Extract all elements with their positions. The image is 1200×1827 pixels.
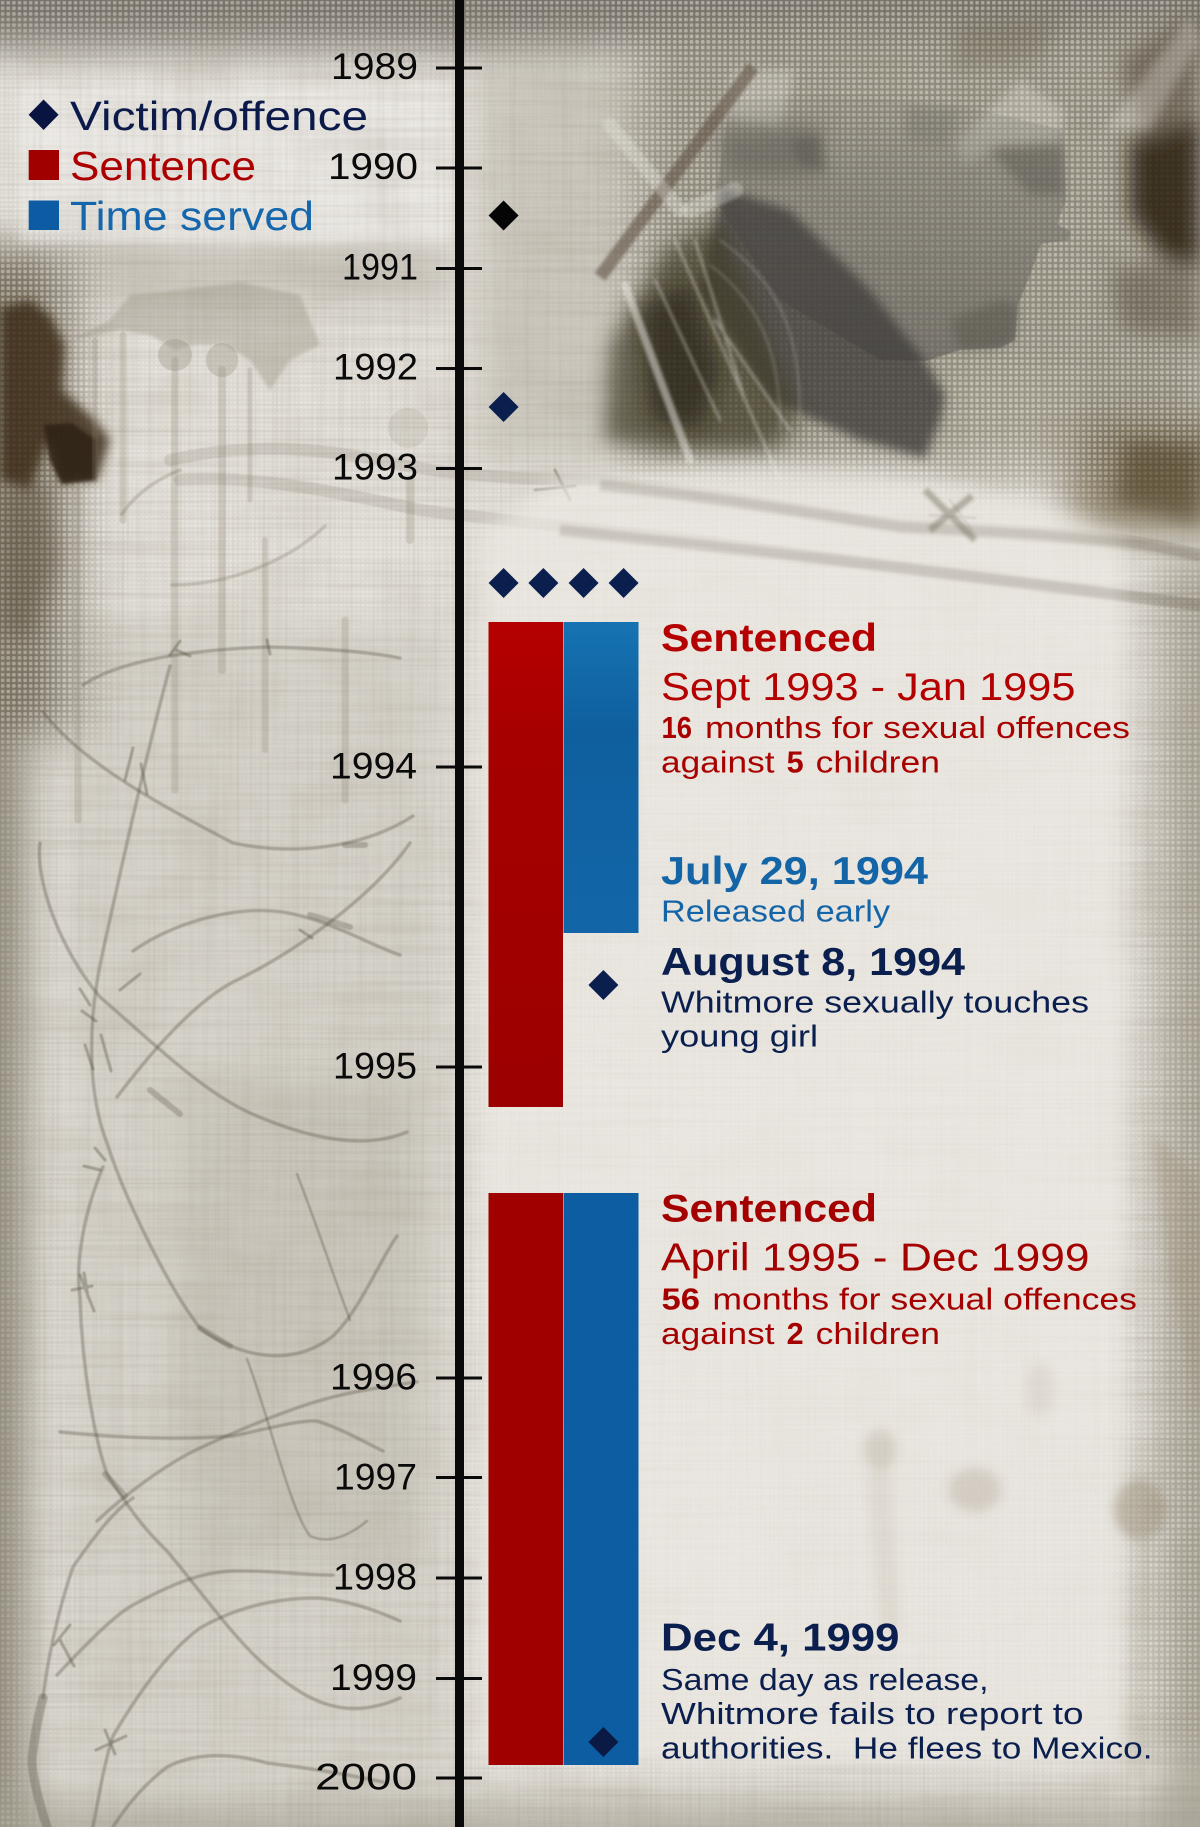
annotation: second sentence — [661, 1188, 1137, 1351]
annotation: second sentence: against — [661, 1316, 775, 1351]
fade of figure toward lower canvas — [480, 465, 1125, 1760]
annotation: second sentence: Sentenced — [661, 1188, 877, 1230]
annotation: first sentence — [661, 617, 1130, 780]
stains and drips on left — [0, 282, 428, 820]
sentence 1 bars — [488, 622, 638, 1107]
barb on wire — [925, 490, 975, 540]
legend: victim/offence: Victim/offence — [70, 93, 368, 139]
top-right canvas stains — [950, 10, 1200, 525]
year labels: 1994 — [330, 746, 417, 786]
marker: August 8 1994 — [588, 970, 618, 1000]
timeline axis — [436, 0, 482, 1827]
diagonal scratch beam — [600, 67, 753, 277]
annotation: second sentence: children — [816, 1316, 940, 1351]
barbed wire illustration — [32, 449, 1200, 1827]
year labels: 1989 — [331, 46, 418, 87]
year labels: 1999 — [330, 1657, 417, 1698]
year labels: 1990 — [328, 146, 418, 187]
annotation: first sentence: Sentenced — [661, 617, 877, 660]
lower right water stains — [864, 1130, 1200, 1780]
jacket shadow — [605, 220, 800, 450]
annotation: August 8 1994: August 8, 1994 — [661, 941, 965, 984]
shoulder and collar — [700, 188, 945, 458]
annotation: second sentence: 2 — [787, 1316, 804, 1351]
portrait of man in profile — [480, 10, 1200, 1760]
legend light patch — [20, 85, 450, 243]
annotation: released early — [661, 850, 928, 928]
annotation: first sentence: 16 — [662, 710, 692, 745]
legend: time served: Time served — [70, 193, 314, 239]
annotation: second sentence: 56 — [662, 1282, 700, 1316]
annotation: Dec 4 1999: Whitmore fails to report to — [661, 1696, 1084, 1731]
wire band across figure base — [560, 485, 1200, 605]
annotation: first sentence: against — [661, 744, 775, 780]
offence markers — [489, 200, 639, 598]
annotation: released early: Released early — [661, 894, 891, 928]
legend: sentence: Sentence — [70, 143, 256, 189]
annotation: Dec 4 1999: authorities. He flees to Mexico. — [661, 1730, 1152, 1766]
head and face — [715, 95, 1071, 361]
annotation: first sentence: children — [816, 744, 940, 780]
annotation: August 8 1994 — [661, 941, 1089, 1054]
marker: Dec 4 1999 — [588, 1727, 618, 1757]
year labels: 1996 — [330, 1356, 417, 1398]
annotation: Dec 4 1999 — [661, 1616, 1152, 1766]
annotation: first sentence: Sept 1993 - Jan 1995 — [661, 666, 1076, 709]
annotation: second sentence: months for sexual offences — [712, 1282, 1137, 1316]
year labels: 1998 — [333, 1556, 417, 1598]
legend — [29, 93, 368, 239]
light scratched patches — [720, 15, 1200, 165]
year labels: 1995 — [333, 1046, 417, 1086]
year labels: 1991 — [342, 246, 418, 288]
year labels: 2000 — [315, 1756, 417, 1798]
year labels: 1993 — [332, 446, 418, 488]
annotation: first sentence: 5 — [787, 744, 804, 780]
annotation: Dec 4 1999: Dec 4, 1999 — [661, 1616, 900, 1660]
year labels: 1992 — [333, 346, 418, 388]
annotation: August 8 1994: Whitmore sexually touches — [661, 984, 1089, 1020]
annotation: first sentence: months for sexual offences — [705, 710, 1130, 745]
sentence 2 bars — [488, 1193, 638, 1765]
annotation: released early: July 29, 1994 — [661, 850, 928, 893]
white scratches over figure — [610, 125, 800, 480]
annotation: Dec 4 1999: Same day as release, — [661, 1662, 988, 1697]
year labels — [315, 46, 418, 1798]
year labels: 1997 — [334, 1456, 417, 1498]
annotation: August 8 1994: young girl — [661, 1018, 818, 1054]
annotation: second sentence: April 1995 - Dec 1999 — [661, 1236, 1090, 1280]
